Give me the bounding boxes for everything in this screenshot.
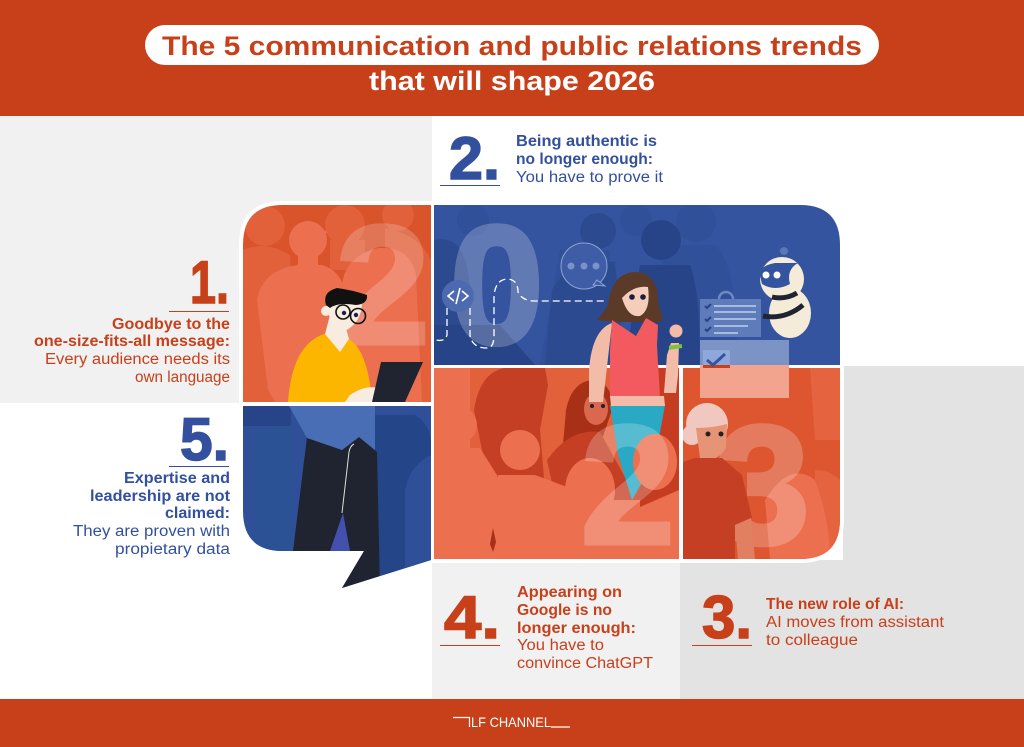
title: that will shape 2026	[369, 66, 655, 96]
browser window	[700, 340, 789, 398]
trend 1: one-size-fits-all message:	[34, 333, 230, 350]
man shirt	[289, 406, 375, 450]
trend 4: longer enough:	[517, 620, 636, 637]
trend 5: 5.	[180, 406, 229, 473]
panel: red middle	[434, 368, 679, 579]
trend 3	[692, 584, 945, 651]
trend 3: AI moves from assistant	[766, 614, 945, 631]
trend 4: convince ChatGPT	[517, 655, 654, 672]
trend 5: claimed:	[165, 505, 230, 522]
hand	[345, 387, 378, 402]
crowd silhouettes	[243, 199, 431, 402]
trend 1: own language	[135, 369, 230, 386]
trend 5: Expertise and	[124, 470, 230, 487]
trend 1: 1.	[190, 249, 229, 316]
trend 3: 3.	[702, 584, 752, 651]
crowd	[632, 368, 679, 507]
foreground crowd	[434, 406, 679, 559]
checklist	[700, 292, 761, 337]
panel: red crowd top left	[243, 191, 431, 402]
trend 4: You have to	[517, 637, 604, 654]
glasses	[336, 305, 350, 319]
header band	[0, 0, 1024, 116]
boy	[682, 403, 755, 559]
trend 2: Being authentic is	[516, 133, 657, 150]
trend 5: They are proven with	[73, 523, 230, 540]
dashed connector	[436, 279, 605, 348]
woman skirt	[610, 405, 665, 500]
speech bubble white outline	[239, 201, 844, 592]
trend 3: to colleague	[766, 632, 858, 649]
large digit 3: 3	[716, 391, 809, 579]
tablet	[372, 362, 423, 402]
trend 5: propietary data	[115, 541, 230, 558]
man in red shirt	[474, 368, 548, 490]
trend 2: no longer enough:	[516, 151, 653, 168]
title: The 5 communication and public relations trends	[162, 31, 862, 61]
title	[162, 31, 862, 96]
robot	[760, 247, 811, 338]
trend 4: 4.	[444, 584, 500, 651]
large digit 0: 0	[450, 191, 543, 379]
crowd	[765, 473, 830, 559]
large digit 2: 2	[581, 391, 674, 579]
large digit 2: 2	[336, 191, 429, 379]
man upper body	[288, 288, 423, 402]
waist	[610, 396, 665, 406]
trend 1	[34, 249, 230, 386]
trend 1: Goodbye to the	[112, 316, 230, 333]
trend 5	[73, 406, 230, 558]
crowd silhouettes	[254, 542, 282, 551]
face	[622, 287, 649, 316]
panel: blue bottom left	[243, 406, 431, 591]
code icon	[442, 280, 474, 312]
hair	[597, 272, 663, 322]
trend 2: You have to prove it	[516, 169, 664, 186]
trend 4: Google is no	[517, 602, 612, 619]
shirt	[288, 334, 372, 402]
girl	[547, 380, 628, 500]
hair	[325, 288, 367, 308]
trend 5: leadership are not	[90, 488, 230, 505]
trend 4: Appearing on	[517, 584, 622, 601]
crowd silhouettes	[457, 202, 737, 365]
trend 2	[440, 125, 664, 192]
arms	[589, 323, 612, 402]
neck and face	[325, 315, 349, 352]
trend 2: 2.	[449, 125, 500, 192]
woman figure	[589, 272, 682, 406]
logo: LF CHANNEL	[471, 714, 551, 730]
trend 4	[440, 584, 654, 672]
footer band	[0, 699, 1024, 747]
top	[610, 318, 660, 397]
trend 3: The new role of AI:	[766, 596, 904, 613]
chat bubble icon	[561, 243, 607, 289]
panel: blue top	[434, 205, 840, 365]
man legs	[330, 514, 350, 551]
panel: red right	[683, 368, 840, 559]
trend 1: Every audience needs its	[45, 351, 230, 368]
